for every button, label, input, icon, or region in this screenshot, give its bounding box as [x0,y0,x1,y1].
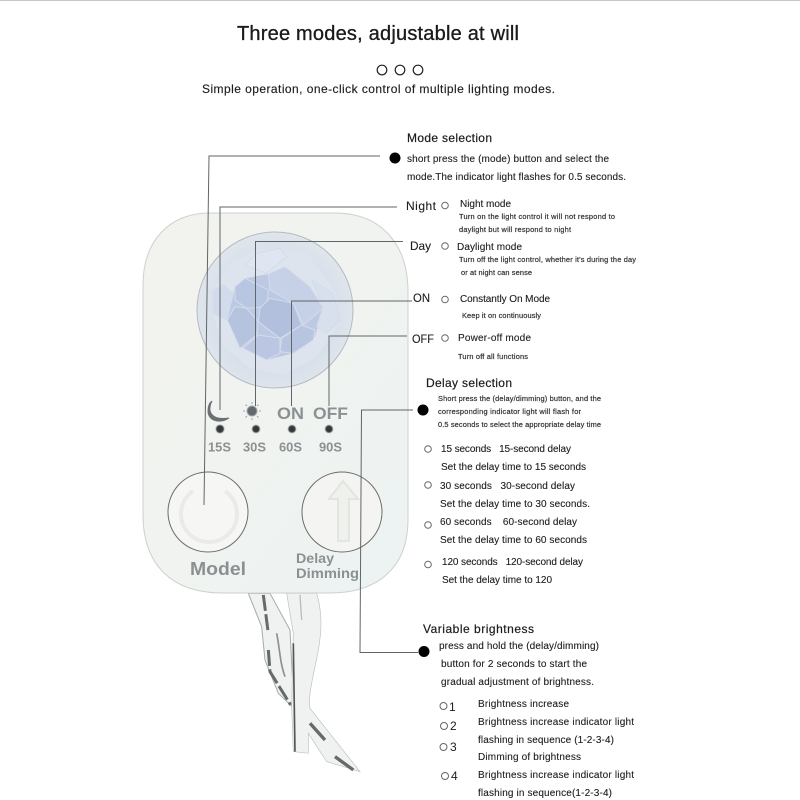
option: 60 seconds: Set the delay time to 60 seconds [440,535,587,546]
option: day: or at night can sense [461,268,532,277]
option: day: Day [410,239,431,253]
delay time labels: 90S [319,440,342,454]
option: 60 seconds [425,517,587,546]
option: on: Keep it on continuously [462,311,541,320]
option: on: Constantly On Mode [460,294,550,305]
brightness descriptions: flashing in sequence(1-2-3-4) [478,788,612,799]
option: night [406,199,615,234]
leader: delay and brightness [360,410,418,652]
leader lines [204,156,418,652]
label: Delay Dimming: Delay [296,550,334,566]
brightness descriptions: Brightness increase [478,699,569,710]
delay selection description: corresponding indicator light will flash for [438,407,582,416]
leader: day [256,242,403,406]
option: 30 seconds [425,481,590,510]
numbered indicators: 3 [450,740,457,754]
option: 120 seconds [425,557,583,586]
option: day [410,239,636,277]
header [202,23,555,96]
option: off [412,332,531,361]
mode selection description [407,154,626,183]
numbered indicators [440,700,458,783]
icon: sun [243,402,261,420]
delay selection description: Short press the (delay/dimming) button, and the [438,394,601,403]
button: delay dimming [302,472,382,552]
leader: on [292,301,412,406]
leader: mode button [204,156,380,505]
variable brightness description: gradual adjustment of brightness. [441,677,594,688]
bullet [390,152,400,164]
delay time labels: 60S [279,440,302,454]
icon: up arrow [329,481,358,541]
option: off: OFF [412,332,434,346]
heading: mode selection: Mode selection [407,131,492,145]
delay selection description [438,394,601,429]
option: 30 seconds: Set the delay time to 30 seconds. [440,499,590,510]
three circles ornament [377,65,423,75]
dome lens [197,232,353,388]
leader: off [329,336,407,406]
delay selection description: 0.5 seconds to select the appropriate delay time [438,420,601,429]
label: ON: ON [277,404,304,423]
top edge strip [0,0,800,1]
mode selection description: short press the (mode) button and select the [407,154,609,165]
brightness descriptions [478,699,634,799]
device: motion sensor controller [143,213,408,772]
delay time labels: 15S [208,440,231,454]
delay time labels [208,440,342,454]
option: 120 seconds: 120 seconds 120-second delay [442,557,583,568]
leader: night [220,207,397,410]
bullet [418,646,430,657]
option: on: ON [413,291,430,305]
option: on [413,291,550,320]
indicator icons [208,401,348,423]
numbered indicators: 1 [449,700,456,714]
panel: mode selection [390,131,636,361]
variable brightness description: press and hold the (delay/dimming) [439,641,599,652]
mode selection description: mode.The indicator light flashes for 0.5 seconds. [407,172,626,183]
option: 120 seconds: Set the delay time to 120 [442,575,552,586]
option: day: Daylight mode [457,242,522,253]
subtitle: Simple operation, one-click control of multiple lighting modes. [202,82,555,96]
brightness descriptions: Dimming of brightness [478,752,581,763]
panel: delay selection [418,376,601,586]
numbered indicators: 2 [450,719,457,733]
heading: variable brightness: Variable brightness [423,622,534,636]
option: off: Power-off mode [458,333,531,344]
option: night: daylight but will respond to night [459,225,571,234]
label: Delay Dimming: Dimming [296,565,359,581]
PIR sensor dome [197,232,353,388]
icon: power symbol [181,491,237,542]
icon: moon [208,401,229,421]
option: 15 seconds: Set the delay time to 15 seconds [441,462,586,473]
option: day: Turn off the light control, whether it's during the day [459,255,636,264]
option: 60 seconds: 60 seconds 60-second delay [440,517,577,528]
option: off: Turn off all functions [458,352,528,361]
option: 15 seconds [425,444,586,473]
lens facets [213,248,340,375]
variable brightness description [439,641,599,688]
panel: variable brightness [418,622,634,799]
option: 30 seconds: 30 seconds 30-second delay [440,481,575,492]
label: Delay Dimming [296,550,359,581]
button: model [168,472,248,552]
delay time labels: 30S [243,440,266,454]
wires [248,593,360,772]
option: night: Night [406,199,437,213]
title: Three modes, adjustable at will [237,23,519,45]
option: night: Turn on the light control it will not respond to [459,212,615,221]
variable brightness description: button for 2 seconds to start the [441,659,587,670]
brightness descriptions: flashing in sequence (1-2-3-4) [478,735,614,746]
label: OFF: OFF [313,404,348,423]
numbered indicators: 4 [451,769,458,783]
option: 15 seconds: 15 seconds 15-second delay [441,444,571,455]
brightness descriptions: Brightness increase indicator light [478,770,634,781]
brightness descriptions: Brightness increase indicator light [478,717,634,728]
heading: delay selection: Delay selection [426,376,512,390]
bullet [418,404,428,416]
option: night: Night mode [460,199,511,210]
device body [143,213,408,593]
label: Model: Model [190,559,246,579]
indicator lights [216,425,333,433]
